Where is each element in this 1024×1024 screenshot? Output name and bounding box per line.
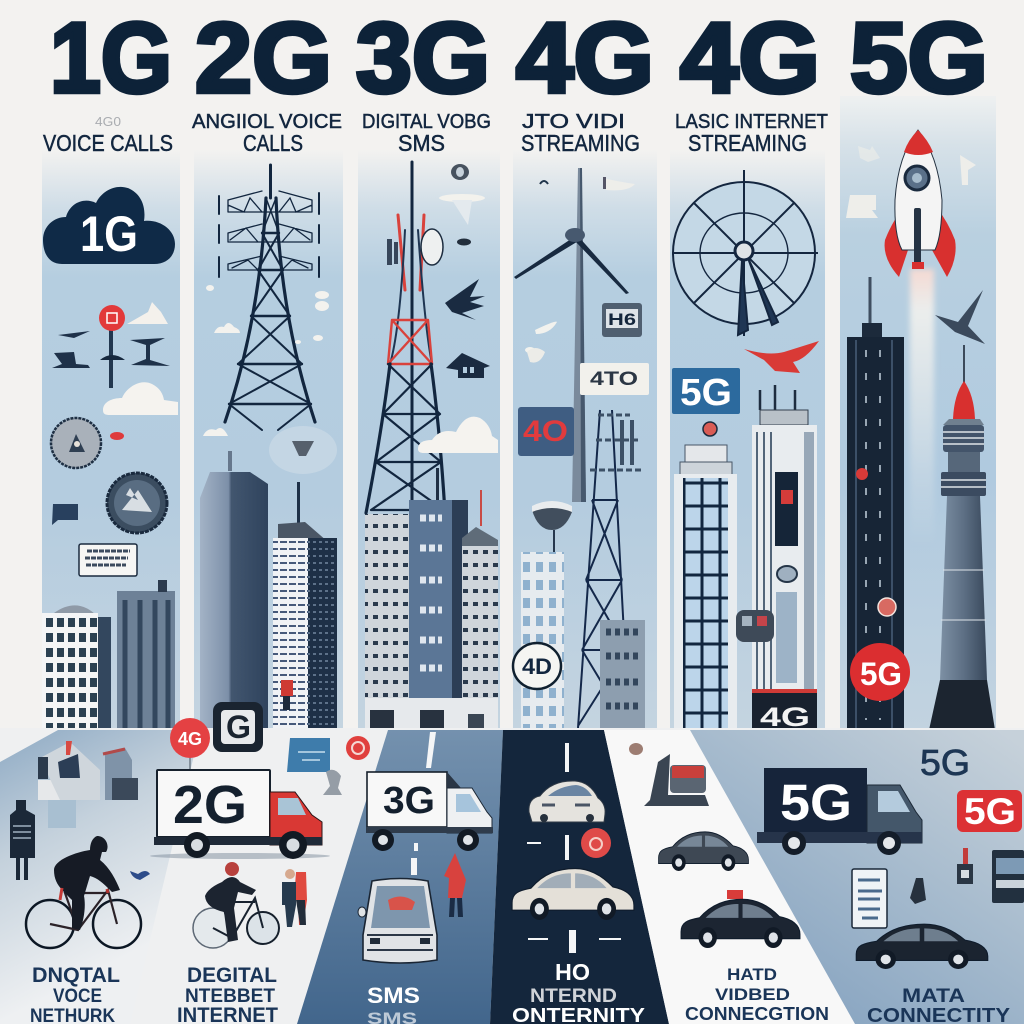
icon: wind turbine tower [514,168,629,502]
heading: analog voice calls: CALLS [243,130,303,156]
car: white sedan lower [512,868,634,920]
icon: red circle [346,736,370,760]
badge: red 5G circle [850,643,910,701]
title row: generation headings [50,2,988,113]
icon: white cloud triangle [127,302,168,324]
text block: digital voice network [30,964,120,1024]
icon: observation tower [929,345,995,730]
heading: voice calls: 4G0 [95,114,121,129]
icon: small device [957,848,973,884]
heading: voice calls: VOICE CALLS [43,130,173,156]
storefront [365,698,498,730]
car: dark sedan upper [658,831,749,871]
building: glass grid block [674,422,737,730]
badge: 4D circle [513,643,561,689]
heading: analog voice calls: ANGIIOL VOICE [192,111,342,133]
heading: digital voice SMS: SMS [398,130,445,156]
icon: cloud [103,382,178,415]
panel: 1G column [42,114,180,730]
icon: grey widget [736,610,774,642]
panel: 3G column [358,111,500,730]
heading: internet streaming: STREAMING [688,130,807,156]
car: white sedan upper [529,781,605,822]
text block: video connection: CONNECGTION [685,1004,829,1024]
icon: signboard [79,544,137,576]
text block: data connectivity [867,986,1011,1024]
badge: H6 [602,303,642,337]
icon: red dot [110,432,124,440]
text block: data connectivity: MATA [902,986,965,1007]
icon: person in red on road [444,853,466,917]
badge: H6: H6 [608,310,636,329]
badge: 4D circle: 4D [522,654,552,679]
icon: document card [852,869,887,928]
badge: 4TO: 4TO [590,369,638,390]
icon: two people [282,869,307,927]
panel: 2G column [192,111,343,730]
icon: 1G cloud: 1G [80,206,138,262]
panel: 4G internet streaming column [670,111,828,732]
icon: dome dish [532,501,572,552]
icon: floating marks [525,177,635,363]
badge: dark 4G: 4G [760,702,810,732]
badge: 4TO [580,363,649,395]
text block: video connection [685,965,829,1024]
panel: ground wedges and roads [0,728,1024,1024]
icon: left clutter of signs [38,741,138,828]
title row: generation headings: 4G [516,2,654,113]
icon: dish antenna [387,229,443,265]
badge: dark 4G [752,689,817,732]
truck: 3G [366,772,493,851]
icon: grey dish [323,770,342,795]
icon: small plane [935,290,985,344]
text block: high speed internet [512,959,646,1024]
icon: lattice transmission tower [219,165,319,430]
icon: red circle on dark road [581,828,611,858]
icon: gauge circle [51,418,101,468]
text block: SMS: SMS [367,983,420,1008]
icon: red machine [629,743,709,806]
badge: blue 5G [672,368,740,414]
icon: blue billboard [287,738,330,772]
icon: navy badge [52,504,78,525]
text block: SMS [367,983,420,1024]
heading: voice calls [43,114,173,156]
badge: G dark rounded mark [213,702,263,752]
heading: internet streaming [675,111,828,156]
truck: 3G: 3G [383,780,435,822]
text block: digital voice network: DNQTAL [32,964,120,987]
icon: small planes [52,331,170,368]
title row: generation headings: 3G [356,2,490,113]
building: small light block [521,552,564,730]
badge: red 5G: 5G [964,791,1016,832]
building: dark 5G tower [847,277,904,730]
title row: generation headings: 4G [680,2,820,113]
text block: digital internet [177,964,278,1024]
title row: generation headings: 2G [195,2,332,113]
badge: blue 5G: 5G [680,372,732,414]
panel: 5G column [840,96,996,730]
text block: video connection: HATD [727,965,777,984]
text block: digital internet: DEGITAL [187,964,277,987]
text block: high speed internet: NTERND [530,986,617,1007]
icon: red 4G balloon [170,718,210,772]
building: white windowed block [42,605,111,730]
truck: 5G [757,768,922,855]
badge: red 4O: 4O [523,415,568,448]
truck: 5G: 5G [780,774,852,831]
icon: phone [992,850,1024,903]
building: white tower [752,385,817,730]
title row: generation headings: 1G [50,2,172,113]
heading: video streaming: JTO VIDI [522,111,625,133]
building: grey right block [600,620,645,730]
badge: red 4O [518,407,574,456]
truck: 2G [150,770,330,859]
panel: 4G video streaming column [513,111,657,730]
icon: second lattice tower [578,410,644,728]
icon: dark standing figure [10,800,35,880]
icon: cyclist 1G [26,836,141,948]
text block: digital voice network: VOCE [53,986,102,1007]
text block: video connection: VIDBED [715,985,790,1004]
car: black sedan right [856,924,988,969]
car: front view [358,878,437,963]
icon: floating shapes [439,164,490,378]
label: 5G text: 5G [920,742,970,783]
text block: high speed internet: HO [555,959,590,985]
icon: red bird plane [744,341,819,373]
truck: 2G: 2G [173,775,247,835]
heading: digital voice SMS [362,111,491,156]
icon: rocket [885,130,956,277]
icon: large wheel dish [672,170,818,336]
building: tall tower [200,451,268,730]
heading: video streaming: STREAMING [521,130,640,156]
icon: floating stars and dishes [846,146,976,218]
icon: exhaust trail [910,269,934,545]
heading: internet streaming: LASIC INTERNET [675,111,828,133]
icon: small dish [269,426,337,474]
building: grey tower [117,580,175,730]
icon: 1G cloud [43,187,175,264]
icon: blue bird [130,871,150,880]
heading: analog voice calls [192,111,342,156]
car: black sedan with red roof sign [681,890,800,948]
building: light left block [365,514,409,730]
building: blue centre block [409,468,468,730]
building: white and dark tower [273,482,337,730]
icon: person in red [281,680,293,710]
text block: digital internet: NTEBBET [185,986,275,1007]
badge: G dark rounded mark: G [226,709,251,745]
icon: cyclist 2G [193,862,279,948]
icon: small antenna with red pin [99,305,125,388]
icon: small clouds [203,285,329,436]
icon: white cloud [418,417,498,453]
heading: digital voice SMS: DIGITAL VOBG [362,111,491,133]
title row: generation headings: 5G [850,2,988,113]
heading: video streaming [521,111,640,156]
icon: red and navy cell tower [366,162,445,514]
icon: red 4G balloon: 4G [178,729,202,749]
badge: red 5G circle: 5G [860,656,902,692]
building: light right block [462,490,498,730]
icon: lens circle [107,473,167,533]
icon: small dark marker [910,878,926,904]
road markings [411,732,621,953]
